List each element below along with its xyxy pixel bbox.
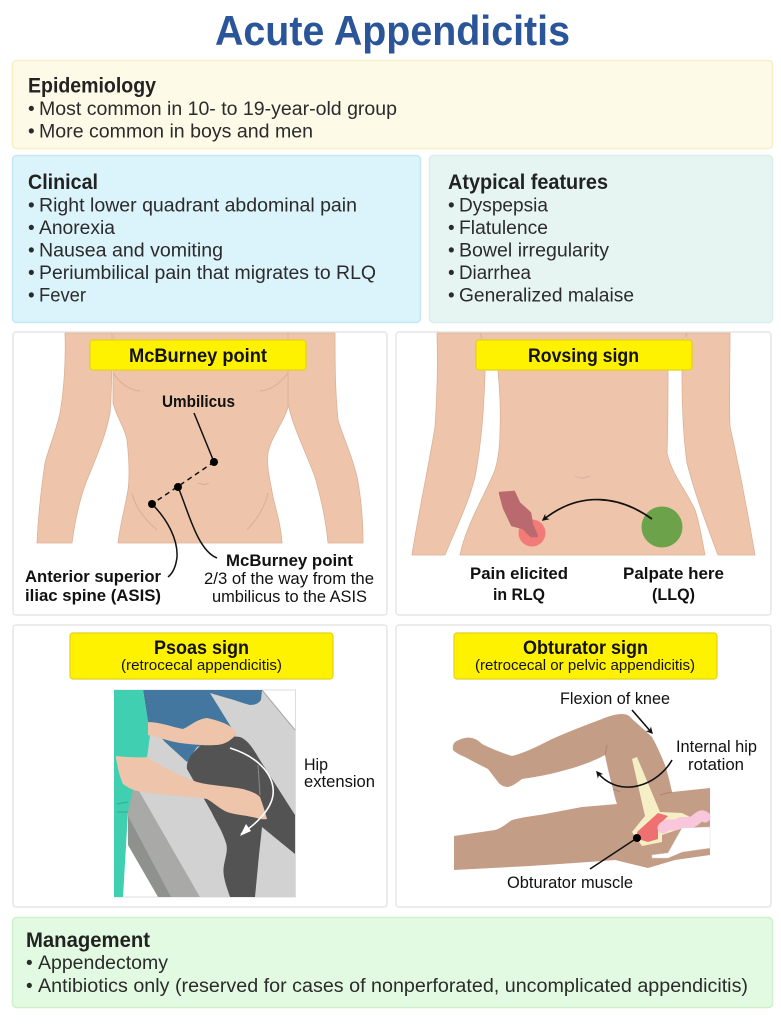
list: atypical features: •	[448, 286, 455, 306]
label: McBurney point definition: McBurney point	[226, 552, 354, 570]
label: flexion of knee: Flexion of knee	[560, 690, 670, 708]
list: atypical features: Generalized malaise	[459, 286, 634, 306]
panel: management	[12, 918, 772, 1008]
panel: clinical	[12, 156, 420, 322]
list: management options	[26, 953, 748, 997]
list: atypical features: Diarrhea	[459, 263, 531, 284]
label: palpate here: Palpate here	[623, 565, 724, 583]
arrow: palpation to pain	[543, 500, 652, 520]
list: clinical features	[28, 196, 376, 306]
label: McBurney point definition	[204, 552, 374, 606]
label: internal hip rotation: rotation	[688, 756, 744, 774]
label: McBurney point definition: umbilicus to the ASIS	[212, 588, 367, 606]
label: internal hip rotation	[676, 738, 757, 774]
label: pain elicited: Pain elicited	[470, 565, 568, 583]
list: clinical features: Nausea and vomiting	[39, 240, 223, 262]
list: epidemiology points: •	[28, 122, 35, 142]
list: clinical features: Anorexia	[39, 218, 115, 239]
label: pain elicited	[470, 565, 568, 604]
heading: atypical features: Atypical features	[448, 171, 608, 194]
label: umbilicus: Umbilicus	[162, 393, 235, 411]
diagram: landmark points and leader lines	[148, 413, 218, 577]
label box: McBurney point	[90, 340, 306, 370]
list: atypical features: •	[448, 263, 455, 284]
label: hip extension	[304, 756, 375, 791]
list: epidemiology points: Most common in 10- to 19-year-old group	[39, 99, 397, 120]
icon: pain area in RLQ	[518, 520, 546, 546]
list: atypical features: Bowel irregularity	[459, 240, 609, 262]
label box: Psoas sign: Psoas sign	[154, 638, 249, 659]
heading: management: Management	[26, 929, 150, 952]
label: hip extension: Hip	[304, 756, 328, 774]
label box: Obturator sign	[454, 633, 717, 679]
label: palpate here	[623, 565, 724, 604]
list: atypical features: Flatulence	[459, 218, 548, 239]
label: pain elicited: in RLQ	[493, 586, 545, 604]
label box: Obturator sign: (retrocecal or pelvic appendicitis)	[475, 657, 695, 674]
label box: Obturator sign: Obturator sign	[523, 638, 648, 659]
arrow: knee flexion	[632, 710, 652, 733]
illustration: psoas manoeuvre	[114, 690, 296, 897]
panel: Rovsing sign	[396, 332, 771, 615]
label: ASIS	[25, 568, 162, 605]
title: Acute Appendicitis	[215, 7, 570, 54]
list: clinical features: Periumbilical pain that migrates to RLQ	[39, 263, 376, 284]
panel: atypical features	[430, 156, 772, 322]
label: McBurney point definition: 2/3 of the way from the	[204, 570, 374, 588]
label box: McBurney point: McBurney point	[129, 346, 268, 367]
icon: appendix	[500, 492, 537, 536]
list: clinical features: •	[28, 218, 35, 239]
list: management options: •	[26, 953, 33, 974]
list: atypical features: Dyspepsia	[459, 196, 548, 216]
label: palpate here: (LLQ)	[652, 586, 695, 604]
list: epidemiology points: •	[28, 99, 35, 120]
label box: Psoas sign	[70, 633, 333, 679]
panel: epidemiology	[12, 60, 772, 148]
list: management options: •	[26, 976, 33, 997]
label: ASIS: Anterior superior	[25, 568, 162, 586]
list: management options: Antibiotics only (reserved for cases of nonperforated, uncomplicated appendicitis)	[38, 976, 748, 997]
arrow: internal hip rotation	[597, 760, 672, 787]
illustration: torso with McBurney landmarks	[37, 333, 363, 543]
leader: obturator muscle	[590, 834, 641, 869]
illustration: abdomen	[412, 333, 755, 555]
list: management options: Appendectomy	[38, 953, 169, 974]
list: atypical features	[448, 196, 634, 306]
list: epidemiology points	[28, 99, 397, 142]
list: clinical features: Fever	[39, 286, 87, 306]
label: obturator muscle: Obturator muscle	[507, 874, 633, 892]
label box: Psoas sign: (retrocecal appendicitis)	[121, 657, 282, 674]
illustration: flexed leg with pelvis	[453, 714, 710, 870]
label: hip extension: extension	[304, 773, 375, 791]
panel: Obturator sign	[396, 625, 771, 907]
list: clinical features: Right lower quadrant abdominal pain	[39, 196, 357, 216]
list: clinical features: •	[28, 286, 35, 306]
list: atypical features: •	[448, 218, 455, 239]
label: internal hip rotation: Internal hip	[676, 738, 757, 756]
list: clinical features: •	[28, 196, 35, 216]
list: epidemiology points: More common in boys and men	[39, 122, 313, 142]
heading: epidemiology: Epidemiology	[28, 74, 156, 98]
panel: Psoas sign	[13, 625, 387, 907]
heading: clinical: Clinical	[28, 171, 98, 194]
label box: Rovsing sign	[476, 340, 692, 370]
list: atypical features: •	[448, 240, 455, 262]
panel: McBurney point	[13, 332, 387, 615]
list: clinical features: •	[28, 263, 35, 284]
label box: Rovsing sign: Rovsing sign	[528, 346, 639, 367]
icon: palpation area in LLQ	[642, 506, 682, 548]
label: ASIS: iliac spine (ASIS)	[25, 587, 161, 605]
list: atypical features: •	[448, 196, 455, 216]
list: clinical features: •	[28, 240, 35, 262]
